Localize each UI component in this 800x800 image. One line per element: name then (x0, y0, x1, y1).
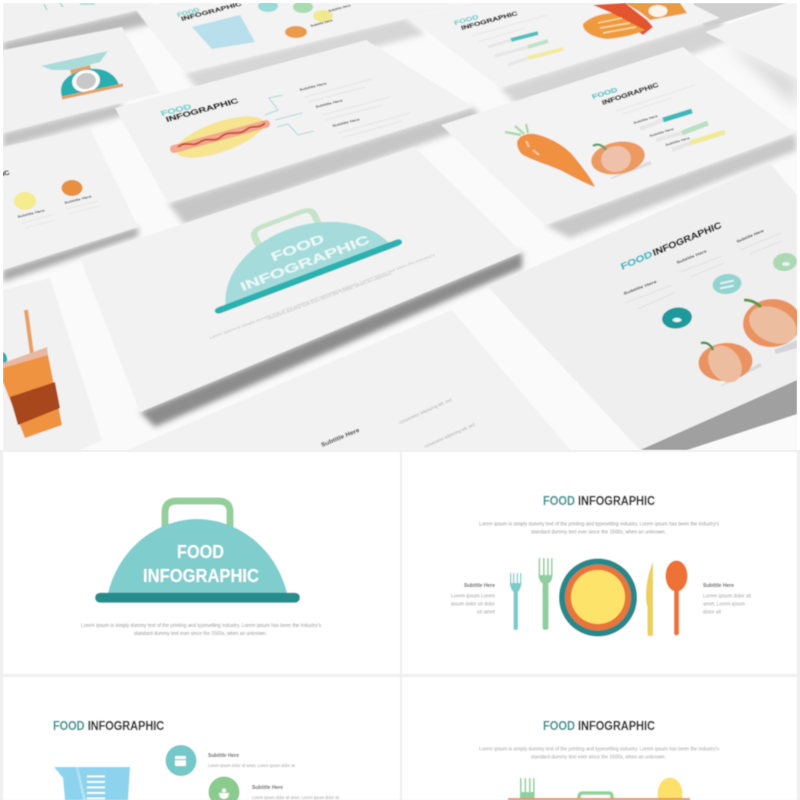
icon: pumpkin body (589, 138, 647, 178)
label: carrot subtitle one: Subtitle Here (633, 114, 659, 125)
label: left subtitle two: Subtitle Here (64, 195, 92, 205)
text: right caption (703, 583, 752, 616)
label: left subtitle one: Subtitle Here (17, 209, 45, 219)
connector lines (265, 95, 314, 135)
icon: scale body (61, 69, 119, 97)
icon: bowl glyphs (672, 262, 790, 322)
icon: straw (26, 310, 32, 354)
icon: bowl circle (208, 776, 240, 800)
slide: lower text slide (127, 310, 570, 450)
icon: pumpkin centre (599, 144, 633, 174)
icon: carrot highlight (526, 141, 539, 155)
icon: lid (3, 347, 48, 369)
heading: beaker food infographic (53, 719, 164, 733)
label: hot dog subtitle three: Subtitle Here (332, 118, 360, 128)
slide: top left partial (3, 3, 156, 42)
icon: carrot body (517, 134, 595, 187)
heading: hot dog infographic: INFOGRAPHIC (164, 96, 240, 124)
label: cup subtitle two: Subtitle Here (310, 19, 333, 28)
label: carrot subtitle three: Subtitle Here (665, 136, 691, 147)
icon: pumpkin stem (593, 145, 606, 150)
slide: measuring cup (136, 3, 404, 58)
icon: partial teal marks (44, 3, 95, 10)
heading: food: FOOD (177, 542, 224, 562)
icon: orange circle (62, 180, 82, 196)
icon: scale dial (71, 69, 101, 93)
text: subtitle one (208, 753, 296, 768)
slide: pumpkins (488, 163, 800, 450)
text: subtitle one: Subtitle Here (208, 753, 239, 759)
text: table description (479, 746, 719, 760)
panel: cover slide (3, 452, 400, 674)
icon: teal circle (661, 306, 693, 330)
icon: dome (205, 199, 389, 305)
bar: burger green (528, 41, 548, 47)
icon: scale pan (41, 51, 108, 70)
heading: cup slide food: FOOD (176, 7, 201, 19)
text: subtitle two (252, 785, 340, 800)
text: cover description: standard dummy text ever since the 1500s, when an unknown. (134, 631, 267, 637)
text: dish description one: Lorem ipsum is simply dummy text of the printing and typesetting industry. Lorem ipsum has been the industry's (209, 253, 436, 340)
heading: table food infographic (543, 719, 655, 733)
heading: dome infographic: INFOGRAPHIC (238, 233, 372, 294)
text: cover description (81, 623, 321, 637)
text: tableware description (479, 522, 719, 536)
label: lower subtitle: Subtitle Here (320, 427, 361, 449)
icon: small pumpkin shadow (720, 363, 762, 386)
slide: drink cup left (3, 278, 102, 450)
icon: small pumpkin centre (701, 339, 749, 389)
heading: carrot food: FOOD (591, 87, 619, 101)
label: cup subtitle one: Subtitle Here (328, 4, 351, 13)
icon: circle teal (258, 3, 278, 12)
icon: circle green (293, 1, 313, 13)
heading: beaker food infographic: FOOD (53, 719, 84, 733)
heading: burger food: FOOD (453, 14, 480, 27)
icon: pumpkin shadow (610, 161, 652, 179)
icon: scale dial centre (76, 72, 96, 90)
bar: carrot green (682, 123, 708, 133)
slide: icons left (1, 128, 138, 270)
label: carrot subtitle two: Subtitle Here (649, 127, 675, 138)
bar: burger yellow (528, 49, 563, 58)
text: table description: standard dummy text ever since the 1500s, when an unknown. (531, 754, 666, 760)
icon: small fork (510, 573, 521, 630)
icon: big pumpkin stem (744, 300, 761, 307)
heading: pumpkin food: FOOD (620, 250, 654, 273)
heading: dome food: FOOD (269, 232, 327, 264)
heading: burger infographic: INFOGRAPHIC (460, 10, 519, 32)
label: hot dog subtitle one: Subtitle Here (299, 82, 327, 92)
text: subtitle one: Lorem ipsum dolor sit amet, Lorem ipsum dolor sit (208, 763, 296, 768)
heading: table food infographic: INFOGRAPHIC (578, 719, 655, 733)
heading: hot dog food: FOOD (159, 102, 193, 118)
label: pumpkin subtitle one: Subtitle Here (623, 279, 658, 296)
text: left caption (451, 583, 496, 616)
icon: cloche dome (108, 519, 287, 593)
text: cover description: Lorem ipsum is simply dummy text of the printing and typesetting industry. Lorem ipsum has been the industry's (81, 623, 321, 629)
icon: burger red block (593, 3, 653, 35)
label: pumpkin subtitle two: Subtitle Here (676, 248, 708, 265)
bar: carrot teal (663, 111, 692, 120)
label: pumpkin subtitle three: Subtitle Here (736, 228, 765, 244)
icon: burger back panel (625, 3, 687, 20)
text: left caption: Lorem ipsum Lorem (451, 594, 495, 600)
heading: table food infographic: FOOD (543, 719, 575, 733)
bar: carrot yellow (690, 132, 725, 143)
text: left caption: Subtitle Here (464, 583, 495, 589)
text: right caption: amet, Lorem ipsum (703, 602, 745, 608)
icon: carrot leaves (505, 124, 528, 135)
icon: aqua circle (711, 272, 743, 296)
icon: hot dog bun (176, 116, 263, 158)
icon: big pumpkin centre (743, 299, 800, 351)
icon: circle orange (285, 26, 307, 38)
icon: plate bar (214, 238, 403, 315)
text: left caption: ipsum dolor sit dolor (451, 602, 495, 608)
text: dish description two: standard dummy text ever since the 1500s, when an unknown. (267, 271, 393, 321)
icon: green fork (520, 778, 535, 799)
panel: beaker slide (3, 677, 400, 800)
icon: yellow circle (14, 192, 36, 210)
icon: orange table bar (508, 798, 690, 800)
icon: teal arc (3, 352, 7, 369)
panel gaps (0, 450, 800, 800)
slide: burger (410, 3, 720, 88)
icon: green circle (772, 251, 798, 273)
icon: hot dog mustard (178, 123, 265, 147)
panel: tableware slide (402, 452, 797, 674)
icon: spoon (666, 560, 688, 636)
heading: pumpkin infographic: INFOGRAPHIC (652, 221, 723, 259)
icon: cloche handle (165, 501, 230, 530)
text: tableware description: Lorem ipsum is simply dummy text of the printing and typesetting industry. Lorem ipsum has been the industry's (479, 522, 719, 528)
slide: carrot (441, 47, 795, 225)
icon: green handle (579, 793, 612, 799)
icon: burger bun (583, 13, 645, 39)
illustration: dish cover skewed (188, 184, 403, 315)
icon: cup body (3, 355, 62, 438)
heading: food infographic: INFOGRAPHIC (578, 494, 655, 508)
bar: burger teal (511, 33, 538, 40)
text: subtitle two: Subtitle Here (252, 785, 283, 791)
slide: kitchen scale (3, 27, 160, 133)
text: subtitle two: Lorem ipsum dolor sit amet, Lorem ipsum dolor sit (252, 795, 340, 800)
heading: infographic: INFOGRAPHIC (143, 566, 259, 586)
heading: food infographic (543, 494, 655, 508)
heading: food infographic: FOOD (543, 494, 575, 508)
icon: big pumpkin body (741, 297, 800, 349)
icon: big pumpkin shadow (774, 340, 797, 354)
icon: oven circle (166, 745, 196, 776)
slide: dish cover (80, 147, 522, 412)
text: left caption: sit amet (477, 610, 496, 616)
icon: burger plate circle (648, 5, 668, 17)
heading: carrot infographic: INFOGRAPHIC (601, 82, 660, 107)
icon: handle (252, 208, 319, 248)
icon: beaker (192, 15, 255, 49)
text: right caption: Subtitle Here (703, 583, 734, 589)
icon: large fork (538, 558, 553, 630)
icon: cloche plate (95, 593, 300, 603)
text: lower line one: consectetur adipiscing elit, sed (399, 397, 453, 425)
icon: small pumpkin stem (701, 343, 713, 350)
icon: knife (646, 562, 653, 636)
text: lower line two: consectetur adipiscing elit, sed (424, 422, 476, 449)
panel: table slide (402, 677, 797, 800)
slide: hot dog (115, 40, 473, 203)
heading: partial title: IC (1, 170, 11, 178)
icon: beaker (54, 767, 130, 800)
icon: small pumpkin body (697, 341, 754, 383)
text: right caption: Lorem ipsum dolor sit (703, 594, 752, 600)
icon: scale base (62, 85, 123, 98)
soft shadows (3, 3, 797, 450)
icon: hot dog sausage (174, 124, 266, 149)
text: table description: Lorem ipsum is simply dummy text of the printing and typesetting industry. Lorem ipsum has been the industry's (479, 746, 719, 752)
icon: plate (559, 558, 637, 636)
heading: beaker food infographic: INFOGRAPHIC (88, 719, 164, 733)
label: hot dog subtitle two: Subtitle Here (315, 99, 343, 109)
icon: burger lines (598, 18, 636, 33)
heading: cup slide infographic: INFOGRAPHIC (180, 1, 243, 23)
icon: sleeve (10, 382, 60, 425)
text: tableware description: standard dummy text ever since the 1500s, when an unknown. (531, 530, 666, 536)
icon: scale neck (70, 64, 92, 75)
text: right caption: dolor sit (703, 610, 722, 616)
panel: isometric slide mosaic (1, 0, 800, 450)
icon: circle yellow (313, 10, 333, 22)
slide: top right (705, 3, 797, 78)
icon: yellow egg (658, 778, 682, 800)
